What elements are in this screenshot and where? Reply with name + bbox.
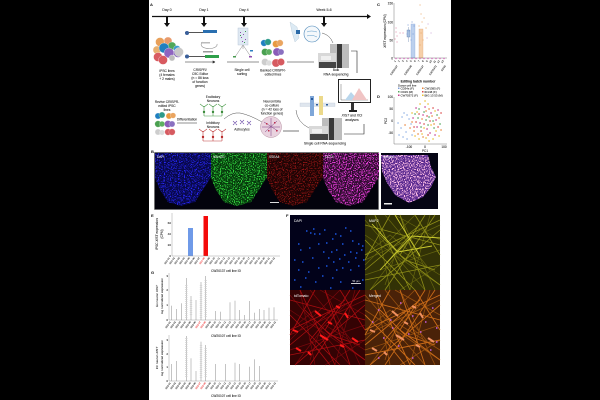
excitatory neuron chart [155, 273, 278, 338]
tick labels: G02-04 [180, 381, 187, 390]
timeline down arrows [164, 17, 327, 27]
box plot [407, 27, 410, 42]
MAP2 image: MAP2 [369, 219, 379, 223]
cell line tick labels: G01-20 [259, 256, 266, 265]
tick labels: G02-11 [215, 381, 222, 390]
NANOG image [211, 153, 267, 209]
panel label C: C [377, 2, 380, 7]
tick labels: G02-08 [200, 381, 207, 390]
cell line tick labels: G01-16 [239, 256, 246, 265]
batch tick labels: 12 [436, 59, 441, 64]
tick labels: G02-07 [195, 381, 202, 390]
tick labels: G02-04 [180, 320, 187, 329]
donor legend: CW1385 (F) [424, 86, 440, 90]
inhibitory neurons: Inhibitory [206, 121, 220, 125]
SSEA4 image [267, 153, 323, 209]
y axis title: XIST expression (CPM) [383, 14, 387, 49]
arrow to monitor [351, 51, 357, 73]
y title: Inh neuron XIST [155, 346, 159, 369]
tick labels: G02-20 [260, 320, 267, 329]
excitatory neurons: Neurons [207, 99, 220, 103]
single-cell sequencer [309, 118, 342, 140]
scatter points [398, 101, 441, 141]
cell line tick labels: G01-12 [219, 256, 226, 265]
tick labels: G02-09 [205, 320, 212, 329]
batch tick labels: CW20107 [389, 64, 399, 76]
data points [186, 338, 206, 378]
donor legend: ID148 (F) [424, 90, 437, 94]
panel label B: B [151, 149, 154, 154]
inhibitory neurons [199, 121, 226, 141]
y ticks: 3 [166, 274, 168, 278]
microfluidic chip [296, 96, 335, 128]
tick labels: G02-06 [190, 320, 197, 329]
tick labels: G02-16 [240, 320, 247, 329]
banked lines caption: Banked CRISPR- [260, 68, 286, 72]
tick labels: G02-13 [225, 320, 232, 329]
batch tick labels: 13 [440, 59, 445, 64]
sorting arrow [227, 61, 259, 63]
tick labels: G02-10 [210, 381, 217, 390]
cell line tick labels: G01-11 [214, 256, 221, 265]
axis titles [384, 118, 428, 153]
y title: iPSC XIST expression [155, 218, 159, 250]
tick labels: G02-10 [210, 320, 217, 329]
cell line tick labels: G01-01 [164, 256, 171, 265]
cell line tick labels: G01-09 [204, 256, 211, 265]
tick labels: G02-21 [265, 320, 272, 329]
y ticks: 0 [391, 119, 393, 123]
y ticks: 1 [166, 303, 168, 307]
batch tick labels: 4 [405, 59, 409, 63]
CRISPR caption: (n = 86 loss [191, 76, 209, 80]
analyses caption: XIST and XCI [341, 114, 362, 118]
y ticks: 3 [166, 338, 168, 342]
co-culture dish [260, 116, 282, 138]
y ticks: 0 [391, 56, 393, 60]
cell sorter [233, 28, 253, 58]
x ticks: 0 [424, 145, 426, 149]
inhibitory neuron chart [155, 335, 278, 398]
timeline day labels: Day 0 [162, 8, 172, 12]
cell line tick labels: G01-15 [234, 256, 241, 265]
y ticks [166, 274, 168, 322]
y title: log normalized expression [160, 340, 164, 376]
donor legend [398, 84, 443, 98]
panel C: XIST expression by editing batch [377, 2, 447, 84]
analysis monitor [338, 80, 370, 112]
y title: log normalized expression [160, 278, 164, 314]
batch tick labels: 1 [393, 59, 397, 63]
tick labels: G02-18 [250, 381, 257, 390]
DAPI image: 50 µm [352, 279, 360, 283]
panel G: neuron XIST expression charts [151, 270, 278, 398]
iPSC lines caption: (4 females [159, 73, 175, 77]
axes [394, 3, 447, 58]
tick labels: G02-02 [170, 320, 177, 329]
batch tick labels: CW20137 [415, 64, 425, 76]
batch tick labels: 10 [428, 59, 433, 64]
panel B: iPSC immunostaining [151, 149, 438, 210]
y ticks: 0 [169, 254, 171, 258]
co-culture caption: function genes) [261, 112, 283, 116]
batch tick labels: 7 [417, 59, 421, 63]
tick labels: G02-03 [175, 381, 182, 390]
y title [155, 218, 164, 250]
cell line tick labels [164, 256, 276, 265]
tdTomato image [290, 290, 365, 365]
panel label F: F [286, 213, 289, 218]
cell line tick labels: G01-14 [229, 256, 236, 265]
iPSC lines caption [159, 69, 175, 81]
tdTomato image: tdTomato [294, 294, 308, 298]
batch tick labels: 9 [425, 59, 429, 63]
axis title: Editing batch number [401, 80, 436, 84]
astrocytes [233, 120, 251, 132]
sorting caption [234, 68, 250, 76]
tick labels: G02-11 [215, 320, 222, 329]
DAPI image: DAPI [294, 219, 302, 223]
tick labels: G02-14 [230, 381, 237, 390]
tick labels: G02-20 [260, 381, 267, 390]
excitatory neurons: Excitatory [206, 95, 221, 99]
y ticks: 2 [166, 352, 168, 356]
iPSC cell cluster [153, 37, 184, 64]
y ticks: 1 [166, 365, 168, 369]
batch tick labels: 5 [409, 59, 413, 63]
batch tick labels: 11 [432, 59, 437, 64]
tick labels: G02-16 [240, 381, 247, 390]
panel label E: E [151, 213, 154, 218]
tick labels: G02-22 [270, 320, 277, 329]
differentiation label and arrow: Differentiation [177, 118, 197, 122]
cell line tick labels: G01-21 [264, 256, 271, 265]
cell line tick labels: G01-07 [194, 256, 201, 265]
co-culture caption [261, 100, 283, 116]
y ticks: 100 [388, 95, 393, 99]
y ticks: -50 [388, 131, 393, 135]
revive caption [155, 100, 179, 112]
merged image: Merged [369, 294, 381, 298]
tick labels: G02-05 [185, 381, 192, 390]
DAPI image [155, 153, 211, 209]
donor legend: BIG 13 53 (M) [424, 94, 443, 98]
tick labels: G02-01 [165, 381, 172, 390]
tick labels: G02-18 [250, 320, 257, 329]
timeline arrowhead [367, 14, 371, 19]
y ticks: 100 [388, 20, 393, 24]
y ticks [388, 95, 393, 135]
cell line tick labels: G01-05 [184, 256, 191, 265]
analyses caption: analyses [345, 118, 359, 122]
tick labels: G02-15 [235, 320, 242, 329]
CRISPR arrow [185, 61, 215, 63]
cell line tick labels: G01-02 [169, 256, 176, 265]
y ticks: 150 [388, 2, 393, 6]
bulk sequencer [318, 44, 349, 68]
DAPI image [290, 215, 365, 290]
excitatory neurons [200, 95, 226, 116]
image frame [154, 152, 378, 210]
batch baseline markers [395, 58, 445, 60]
arrow to single-cell sequencing [283, 130, 299, 132]
batch tick labels: CW70372 [428, 64, 438, 76]
iPSC lines caption: + 2 males) [159, 77, 175, 81]
co-culture caption: Neuron/Glia [263, 100, 281, 104]
batch tick labels: CD19 [440, 64, 447, 72]
OCT4 image: OCT4 [325, 155, 334, 159]
panel F: neuron immunostaining [286, 213, 440, 365]
tick labels: G02-13 [225, 381, 232, 390]
tick labels: G02-06 [190, 381, 197, 390]
tick labels: G02-01 [165, 320, 172, 329]
iPSC lines caption: iPSC lines [159, 69, 175, 73]
tick labels: G02-19 [255, 381, 262, 390]
MAP2 image [365, 215, 440, 290]
x title: CW20107 cell line ID [211, 394, 242, 398]
inhibitory neurons: Neurons [207, 125, 220, 129]
y ticks: 40 [168, 232, 171, 236]
donor legend: CW70372 (F) [400, 94, 418, 98]
panel label A: A [150, 2, 153, 7]
y ticks [166, 338, 168, 383]
panel D: PCA scatter [377, 84, 447, 153]
NANOG image: NANOG [213, 155, 225, 159]
tick labels: G02-12 [220, 381, 227, 390]
axes [169, 335, 278, 381]
SSEA4 image: SSEA4 [269, 155, 280, 159]
donor legend: CD34s (F) [400, 86, 414, 90]
tick labels: G02-22 [270, 381, 277, 390]
bars [411, 24, 423, 58]
astrocytes: Astrocytes [234, 128, 250, 132]
batch tick labels: 6 [413, 59, 417, 63]
y ticks: 50 [389, 38, 393, 42]
banked lines caption [260, 68, 286, 76]
analyses caption [341, 114, 362, 122]
bars [188, 216, 208, 256]
tick labels: G02-07 [195, 320, 202, 329]
cell line tick labels: G01-22 [269, 256, 276, 265]
x ticks [406, 145, 447, 149]
timeline arrow [152, 16, 368, 18]
cell line tick labels: G01-17 [244, 256, 251, 265]
merged image [365, 290, 440, 365]
panel label D: D [377, 94, 380, 99]
CRISPR plasmid constructs [185, 30, 219, 58]
y title: Ex neuron XIST [155, 284, 159, 307]
tick labels [165, 320, 277, 329]
banked edited lines cells [261, 39, 285, 67]
panel label G: G [151, 270, 154, 275]
OCT4 image [323, 153, 379, 209]
data points [395, 5, 431, 45]
y ticks [168, 221, 171, 258]
donor legend: Donor cell line [398, 84, 417, 88]
bulk sequencing caption: RNA-sequencing [324, 72, 349, 76]
CRISPR caption: of function [192, 80, 208, 84]
cell line tick labels: G01-18 [249, 256, 256, 265]
CRISPR caption: C9C Editor [192, 72, 209, 76]
tick labels: G02-21 [265, 381, 272, 390]
y title: (CPM) [160, 229, 164, 239]
timeline day labels: Day 1 [199, 8, 209, 12]
revive caption: Revive CRISPR- [155, 100, 179, 104]
co-culture caption: (n = 42 loss of [262, 108, 282, 112]
sorting caption: Single cell [234, 68, 250, 72]
cell line tick labels: G01-10 [209, 256, 216, 265]
arrow to bulk sequencing [287, 61, 314, 63]
panel E: iPSC XIST bar chart [151, 213, 280, 273]
x ticks: -100 [406, 145, 412, 149]
CRISPR caption [191, 68, 209, 88]
cell line tick labels: G01-13 [224, 256, 231, 265]
x title: CW20107 cell line ID [211, 334, 242, 338]
axis titles: PC2 [384, 118, 388, 124]
timeline day labels [162, 8, 332, 12]
merged image [381, 153, 438, 209]
donor legend: CD19 (M) [400, 90, 413, 94]
arrow to analyses [344, 124, 364, 134]
cell line tick labels: G01-19 [254, 256, 261, 265]
batch tick labels: 3 [401, 59, 405, 63]
tick labels: G02-12 [220, 320, 227, 329]
CRISPR caption: genes) [195, 84, 205, 88]
tick labels: G02-02 [170, 381, 177, 390]
data points [186, 280, 206, 318]
tick labels: G02-19 [255, 320, 262, 329]
batch tick labels: 8 [421, 59, 425, 63]
axis titles: PC1 [422, 149, 428, 153]
panel A: experimental workflow [150, 2, 371, 146]
y title [155, 278, 164, 314]
tick labels: G02-17 [245, 320, 252, 329]
revive caption: lines [164, 108, 171, 112]
cell line tick labels: G01-04 [179, 256, 186, 265]
tick labels: G02-05 [185, 320, 192, 329]
bars [172, 336, 259, 381]
tick labels: G02-14 [230, 320, 237, 329]
page background [149, 0, 451, 400]
sorting caption: sorting [237, 72, 247, 76]
timeline day labels: Week 5-6 [316, 8, 332, 12]
connector to co-culture [224, 113, 262, 122]
cell line tick labels: G01-06 [189, 256, 196, 265]
y ticks: 0 [166, 318, 168, 322]
DAPI image: DAPI [157, 155, 165, 159]
co-culture caption: co-culture [265, 104, 279, 108]
x ticks: 100 [441, 145, 447, 149]
tick labels: G02-08 [200, 320, 207, 329]
cell line tick labels: G01-08 [199, 256, 206, 265]
y ticks: 60 [168, 221, 171, 225]
revived cells [155, 112, 176, 135]
axes [169, 273, 278, 320]
RNA tube and dish [290, 22, 333, 43]
cell line tick labels: G01-03 [174, 256, 181, 265]
tick labels: G02-09 [205, 381, 212, 390]
y ticks: 0 [166, 379, 168, 383]
single-cell caption: Single cell RNA-sequencing [304, 142, 346, 146]
timeline day labels: Day 4 [239, 8, 249, 12]
banked lines caption: edited lines [265, 72, 282, 76]
x title: CW20137 cell line ID [211, 269, 242, 273]
tick labels: G02-17 [245, 381, 252, 390]
merged image: Merged [383, 155, 394, 159]
revive caption: edited iPSC [158, 104, 176, 108]
y title [155, 340, 164, 376]
y ticks: 20 [168, 243, 171, 247]
y ticks: 50 [389, 107, 393, 111]
axes [394, 97, 447, 144]
y ticks: 2 [166, 288, 168, 292]
batch tick labels: 2 [397, 59, 401, 63]
batch tick labels [389, 59, 447, 76]
axes [172, 213, 280, 256]
tick labels [165, 381, 277, 390]
bars [172, 276, 274, 320]
bulk sequencing caption [324, 68, 349, 76]
tick labels: G02-15 [235, 381, 242, 390]
tick labels: G02-03 [175, 320, 182, 329]
y ticks [388, 2, 393, 60]
batch tick labels: CW20148 [403, 64, 413, 76]
CRISPR caption: CRISPR/ [193, 68, 207, 72]
bulk sequencing caption: Bulk [333, 68, 340, 72]
